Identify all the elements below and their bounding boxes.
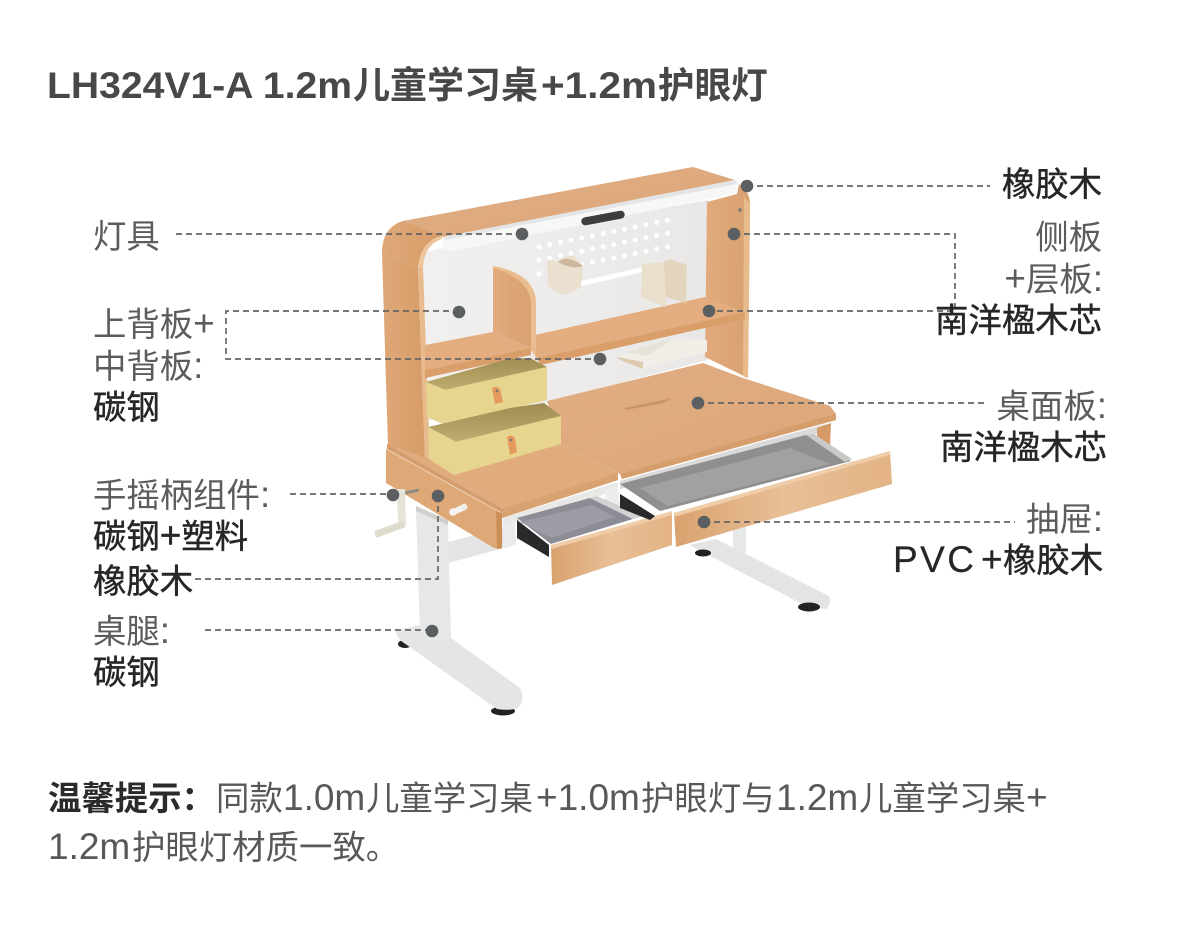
label: lamp: 灯具 [93,219,160,256]
white back panel [423,200,708,420]
label: rubber wood left: 橡胶木 [93,564,193,601]
note: 儿童学习桌 [859,781,1026,818]
label: desktop [940,385,1107,467]
left drawer interior [517,496,644,557]
hutch left side panel [382,253,430,460]
label: upper and middle back panel [93,303,215,427]
lower yellow drawer [428,403,561,475]
title: 护眼灯 [658,65,768,106]
note: 1.0m [283,777,365,818]
title [47,65,768,106]
label: crank assembly: 手摇柄组件: [93,474,270,515]
right leg and base [689,518,830,612]
note: + [1026,777,1048,818]
title: +1.2m [541,65,657,106]
upper yellow drawer [426,358,547,425]
right drawer interior [620,434,852,520]
pegboard holes [539,220,669,274]
right drawer front [674,451,892,547]
hutch top surface [403,167,738,237]
white knob [449,504,467,516]
note: 护眼灯材质一致。 [132,830,399,867]
line: apron rubber wood [195,496,438,579]
note: 儿童学习桌 [366,781,533,818]
hutch left curved top [382,221,442,268]
label: drawer [893,498,1103,580]
left leg and base [396,506,523,716]
shelf: right [535,297,745,365]
label: upper and middle back panel: 上背板+ [93,303,215,344]
title: 儿童学习桌 [353,65,538,106]
note: 温馨提示： [48,781,215,818]
white rail on pegboard [581,267,643,286]
label: drawer: 橡胶木 [1003,543,1103,580]
desktop right tilting panel [547,363,836,479]
note: 同款 [216,781,283,818]
callout dots [387,180,753,637]
label: drawer: + [981,539,1003,580]
label: rubber wood top right: 橡胶木 [1002,167,1102,204]
leader lines [176,186,1015,630]
label: side panel and shelf: +层板: [1004,258,1103,299]
line: leg [205,629,432,631]
label: side panel and shelf: 南洋楹木芯 [935,303,1102,340]
line: lamp [176,233,522,235]
hand crank [374,489,419,538]
desktop left fixed panel [387,444,618,518]
shelf divider [493,266,536,358]
label: upper and middle back panel: 中背板: [93,345,203,386]
line: crank [290,493,393,495]
label: side panel and shelf: 侧板 [1035,220,1102,257]
label: drawer: 抽屉: [1026,498,1103,539]
label: drawer: PVC [893,539,974,580]
label: side panel and shelf [935,220,1103,340]
label: crank assembly: 碳钢+塑料 [93,515,248,556]
line: desktop [698,402,985,404]
label: desktop: 桌面板: [997,385,1107,426]
metal frame under desktop [503,423,831,548]
note: 1.2m [48,826,130,867]
note: +1.0m [536,777,640,818]
hutch right side panel [705,184,750,378]
pen holder [547,256,583,295]
line: drawer [704,521,1015,523]
line: top rubber wood [747,185,990,187]
line: side panel and shelf [709,234,955,311]
title: LH324V1-A 1.2m [47,65,352,106]
label: desk leg [93,610,170,692]
label: crank assembly [93,474,270,556]
line: back panels [226,311,600,359]
note [48,777,1048,867]
label: desk leg: 桌腿: [93,610,170,651]
label: desk leg: 碳钢 [93,655,160,692]
note: 1.2m [776,777,858,818]
label: upper and middle back panel: 碳钢 [93,390,160,427]
label: desktop: 南洋楹木芯 [940,430,1107,467]
under shelf tray [617,340,707,369]
desk left side apron [386,449,502,549]
book divider holder [641,259,687,307]
desk illustration [374,167,892,716]
left drawer front [551,511,672,585]
shelf: left [425,332,531,378]
lamp bar [443,180,738,251]
note: 护眼灯与 [641,781,775,818]
